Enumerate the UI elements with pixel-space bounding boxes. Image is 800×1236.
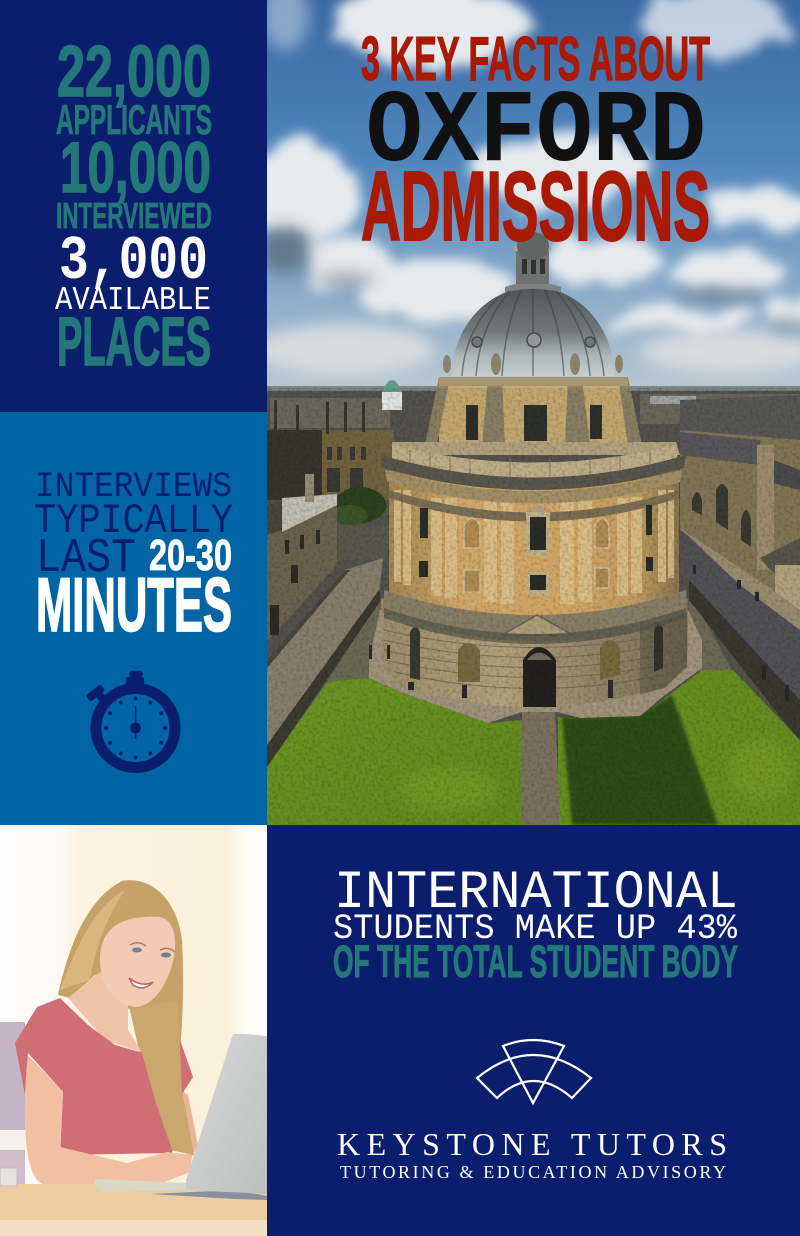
grass: [267, 670, 800, 825]
arm: [25, 1055, 192, 1186]
stat: 22,000 applicants: [56, 32, 212, 143]
windows: [419, 505, 653, 594]
back college: [322, 430, 394, 500]
title: OXFORD: [366, 74, 706, 191]
side arm: [182, 1092, 198, 1158]
title: [361, 25, 710, 261]
neck and chest: [68, 972, 142, 1052]
stat: 22,000 applicants: 22,000: [57, 32, 211, 112]
panel: international students and logo: [267, 825, 800, 1236]
right road: [680, 530, 800, 700]
photo: girl using a laptop: [0, 825, 267, 1236]
right buildings: [680, 430, 800, 592]
hair over shirt: [130, 1000, 194, 1155]
photo: Radcliffe Camera, Oxford: [238, 0, 800, 828]
icon: stopwatch: [86, 671, 175, 768]
columns: [394, 490, 674, 604]
panel: admissions numbers: [0, 0, 267, 412]
green cupola: [382, 380, 402, 410]
stat: 10,000 interviewed: INTERVIEWED: [56, 195, 212, 236]
urns: [443, 353, 623, 375]
international students text: INTERNATIONAL: [334, 863, 738, 924]
eyes and mouth: [129, 943, 175, 988]
panel: interview length: [0, 412, 267, 825]
logo: keystone arch: [477, 1040, 591, 1103]
logo wordmark: [337, 1126, 727, 1182]
face: [100, 917, 175, 1007]
window blocks: [0, 1022, 25, 1130]
interview text: LAST: [36, 532, 136, 586]
international students text: STUDENTS MAKE UP 43%: [333, 909, 738, 949]
path to entrance: [522, 708, 560, 825]
left building: [267, 497, 337, 640]
interview text: 20-30: [149, 531, 232, 580]
rusticated base: [381, 598, 688, 708]
stat: 3,000 available: [55, 226, 211, 319]
main cylinder: [389, 470, 679, 630]
international students text: [333, 863, 738, 987]
lantern: [505, 232, 561, 292]
lower ground fill: [267, 391, 800, 776]
balustrade and cornice: [392, 442, 680, 455]
left wall: [267, 590, 381, 767]
upper drum: [439, 386, 628, 442]
entablature and pediment: [383, 590, 687, 641]
logo wordmark: KEYSTONE TUTORS: [337, 1126, 727, 1162]
stat: 3,000 available: AVAILABLE: [55, 282, 211, 319]
table: [0, 1184, 267, 1220]
left road: [267, 558, 383, 745]
papers: [150, 1190, 267, 1200]
left lower stone strip: [327, 596, 386, 682]
stat: 10,000 interviewed: 10,000: [60, 129, 211, 208]
stat: 3,000 available: 3,000: [59, 226, 208, 297]
laptop: [94, 1034, 267, 1194]
interview text: MINUTES: [36, 563, 232, 648]
interview text: TYPICALLY: [34, 497, 233, 545]
pavement: [369, 610, 702, 723]
shirt: [15, 998, 193, 1155]
right wall: [689, 580, 800, 742]
hair: [58, 880, 194, 1155]
interview text: [34, 467, 233, 648]
arches and door: [410, 623, 663, 707]
right lower stone strip: [688, 599, 732, 672]
stone and roof texture: [267, 388, 800, 825]
capitals band: [389, 490, 679, 522]
stat: 10,000 interviewed: [56, 129, 212, 236]
stat: 22,000 applicants: APPLICANTS: [56, 96, 212, 143]
trees and back wall: [338, 525, 388, 560]
dome: [452, 287, 614, 376]
logo wordmark: TUTORING & EDUCATION ADVISORY: [340, 1162, 726, 1182]
stat: places: PLACES: [57, 303, 211, 380]
people: [369, 565, 789, 701]
interview text: INTERVIEWS: [35, 467, 232, 507]
glass object: [0, 1168, 17, 1186]
